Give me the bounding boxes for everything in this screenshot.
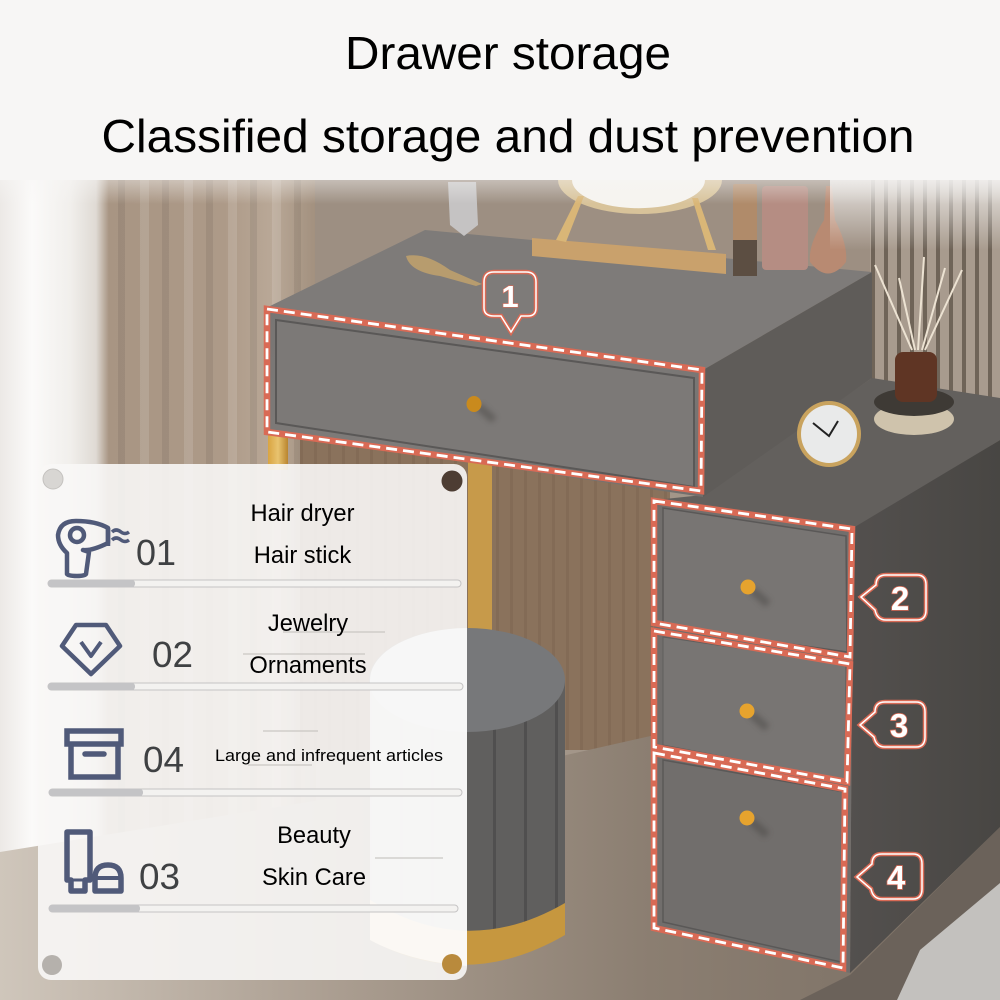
callout 1: 1 [501,279,519,314]
dashed outlines of drawers [267,309,852,968]
panel: storage list [38,464,467,980]
screw bottom-left [42,955,62,975]
drawer knobs [740,580,768,835]
title band [0,0,1000,162]
callout 4 [857,854,922,899]
number 01: 01 [136,532,176,573]
mirror and tabletop items [406,180,846,286]
progress bar 2 [48,683,463,690]
number 04: 04 [143,739,184,780]
callout 3: 3 [890,707,908,744]
label: jewelry: Jewelry [268,611,348,637]
callout 2: 2 [891,580,909,617]
icon: skin care [67,832,121,891]
label: ornaments: Ornaments [249,653,367,679]
fade below title [0,180,1000,204]
icon: diamond [62,625,120,674]
screw top-right [442,470,462,492]
screw bottom-right [442,954,462,974]
number 02: 02 [152,634,193,675]
fade on right wall [830,180,1000,250]
upper drawer unit [266,230,872,497]
callout 2 [861,575,926,620]
callout 1 [484,272,536,332]
heading: drawer storage: Drawer storage [345,27,671,79]
screw top-left [43,469,63,489]
icon: storage box [67,731,121,777]
number 03: 03 [139,856,180,897]
label: beauty: Beauty [277,823,351,849]
label: large articles: Large and infrequent articles [215,746,443,765]
label: hair dryer: Hair dryer [251,501,355,527]
progress bar 4 [49,905,458,912]
progress bar 3 [49,789,462,796]
clock [797,401,861,467]
progress bar 1 [48,580,461,587]
subheading: Classified storage and dust prevention [102,110,914,162]
gold table leg left [268,430,288,470]
reed diffuser [874,257,962,435]
gold table leg middle [468,460,492,630]
top band strip [0,162,1000,180]
callout 4: 4 [887,859,906,896]
icon: hair dryer [58,521,129,576]
stool [369,628,565,965]
lower cabinet [654,378,1000,973]
label: skin care: Skin Care [262,865,366,891]
callout 3 [860,702,925,747]
label: hair stick: Hair stick [254,543,351,569]
